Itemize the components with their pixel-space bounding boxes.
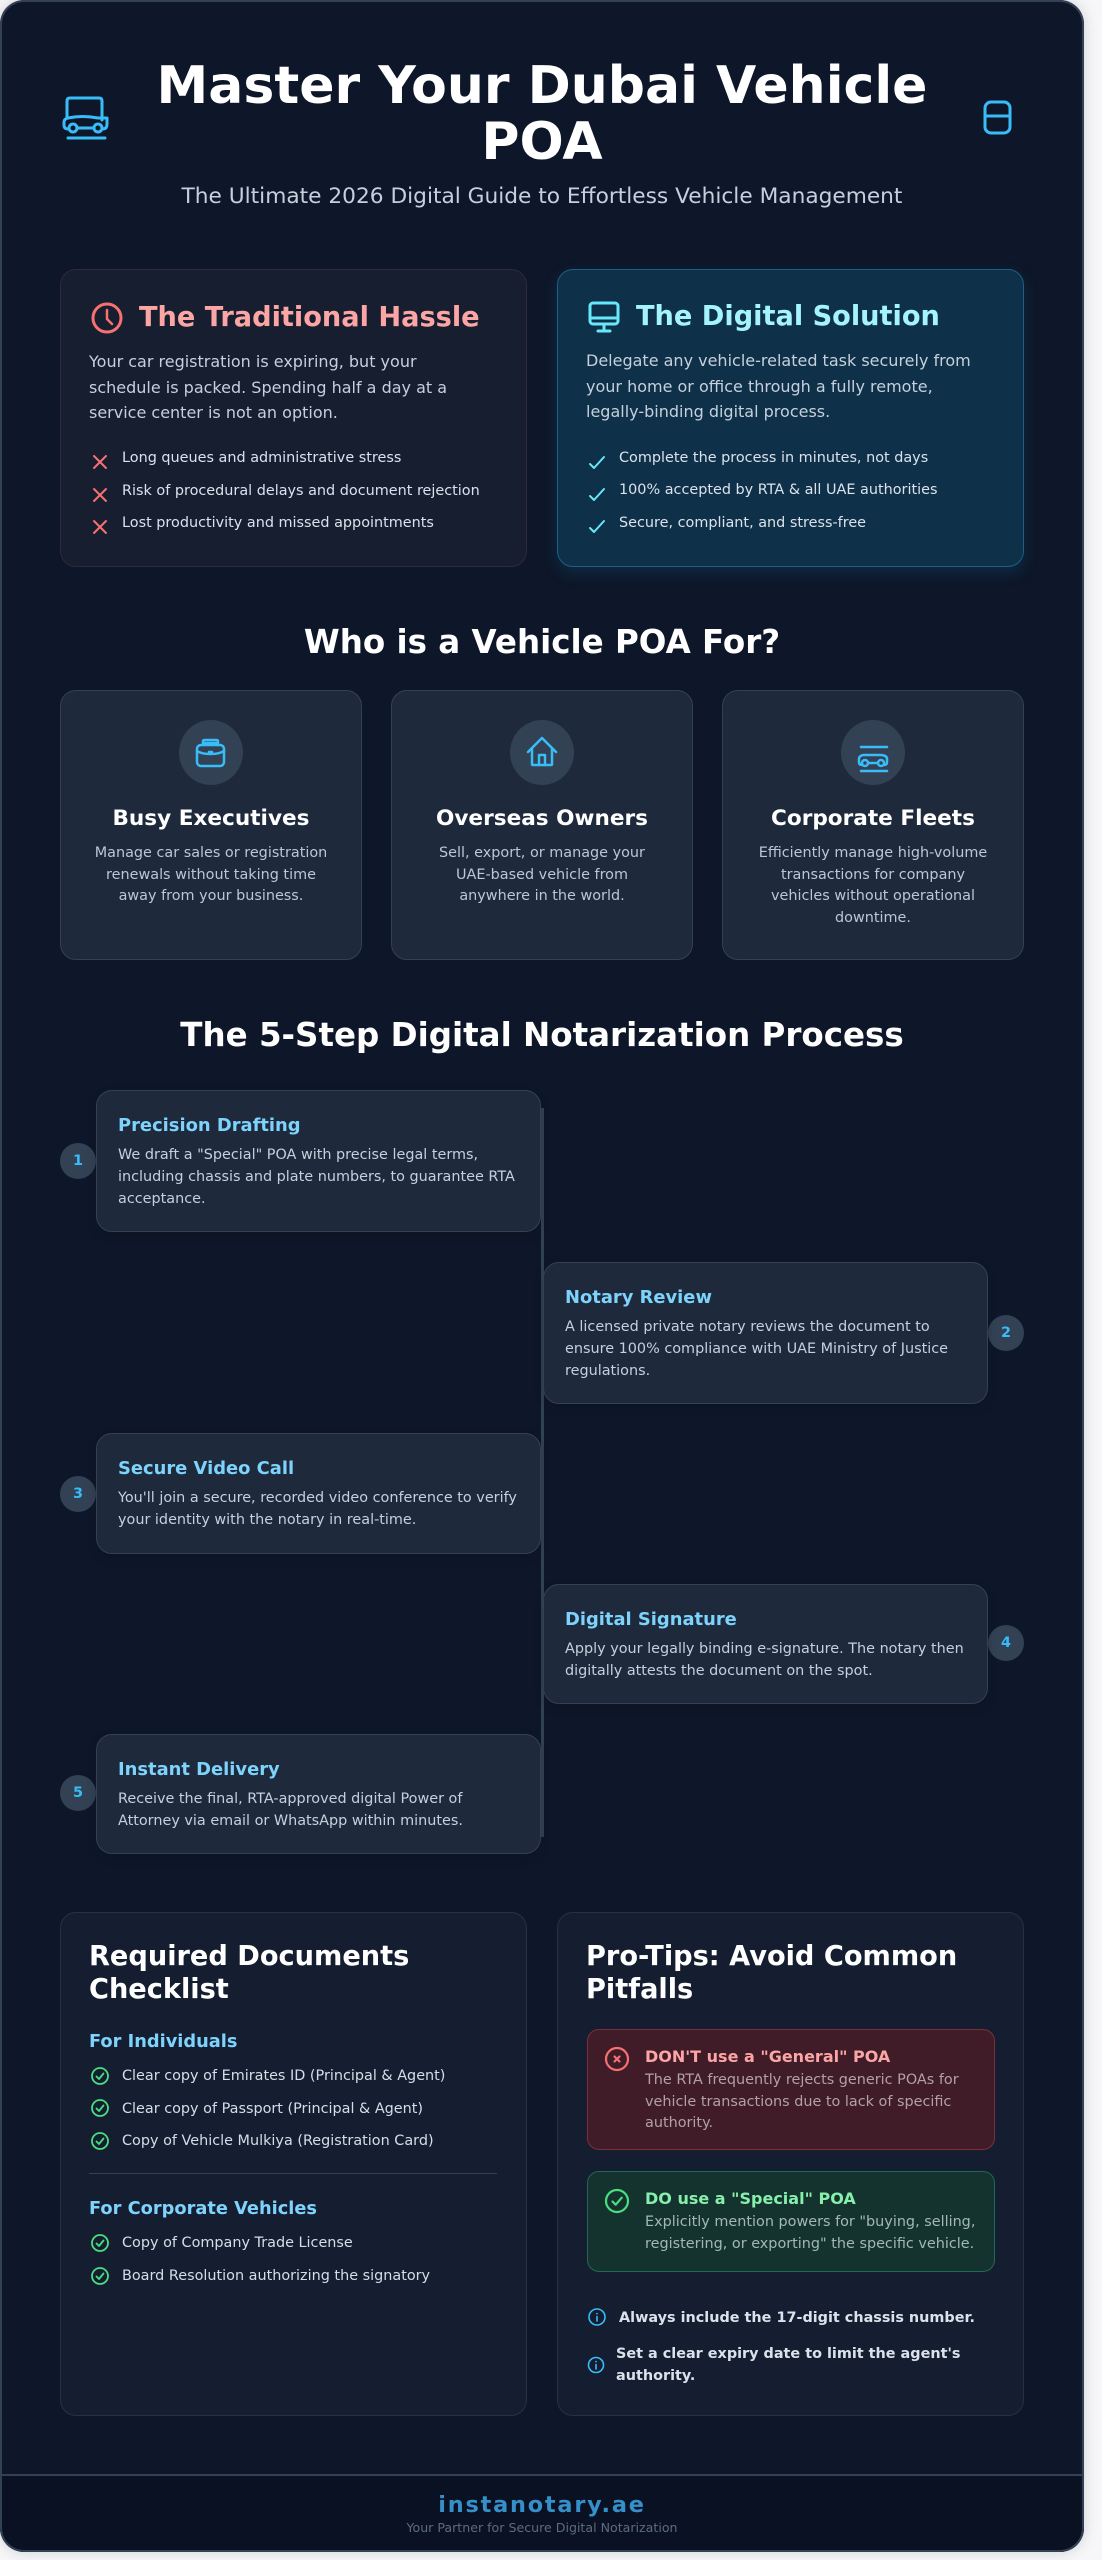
- paragraph: Delegate any vehicle-related task securely from: [586, 351, 971, 370]
- callout: do: registering, or exporting" the specific vehicle.: [645, 2236, 974, 2252]
- card text: renewals without taking time: [106, 867, 316, 883]
- step 2 card: Notary Review: [565, 1287, 712, 1308]
- card text: Sell, export, or manage your: [439, 845, 645, 861]
- step 1 card: including chassis and plate numbers, to guarantee RTA: [118, 1169, 515, 1185]
- card text: downtime.: [835, 910, 911, 926]
- callout: don't: [587, 2029, 995, 2150]
- heading: [586, 1941, 957, 2005]
- heading: The Digital Solution: [636, 301, 940, 332]
- tip: expiry date: authority.: [616, 2368, 695, 2384]
- step 5 card: Instant Delivery: [118, 1759, 280, 1780]
- icon: cross: [93, 455, 107, 469]
- timeline line: [541, 1108, 544, 1837]
- heading: Pro-Tips: Avoid Common: [586, 1941, 957, 1972]
- step 5 card: Attorney via email or WhatsApp within minutes.: [118, 1813, 463, 1829]
- heading: [89, 1941, 409, 2005]
- step 1 number: [60, 1143, 96, 1179]
- timeline: [60, 1090, 1024, 1854]
- icon: check: [589, 520, 605, 533]
- step 5 number: 5: [73, 1785, 83, 1801]
- callout: don't: The RTA frequently rejects generic POAs for: [645, 2072, 959, 2088]
- icon: check circle: [604, 2188, 630, 2214]
- step 2 number: [988, 1315, 1024, 1351]
- footer: [0, 2474, 1084, 2552]
- list: benefits: [589, 450, 937, 533]
- icon: info: [588, 2356, 604, 2374]
- icon: cross: [93, 488, 107, 502]
- step 4 card: Digital Signature: [565, 1609, 737, 1630]
- checklist: individuals: Clear copy of Emirates ID (Principal & Agent): [122, 2068, 445, 2084]
- icon: check circle: [91, 2132, 109, 2150]
- card text: away from your business.: [119, 888, 303, 904]
- checklist: corporate: Board Resolution authorizing the signatory: [122, 2268, 430, 2284]
- step 3 card: [96, 1433, 541, 1554]
- list: drawbacks: Lost productivity and missed appointments: [122, 515, 434, 531]
- heading: Pitfalls: [586, 1974, 693, 2005]
- panel: corporate fleets: [722, 690, 1024, 960]
- step 1 card: [96, 1090, 541, 1232]
- list: drawbacks: Risk of procedural delays and document rejection: [122, 482, 480, 498]
- card text: UAE-based vehicle from: [456, 867, 628, 883]
- icon: cross circle: [604, 2046, 630, 2072]
- paragraph: your home or office through a fully remote,: [586, 377, 933, 396]
- card title: Overseas Owners: [436, 806, 648, 830]
- checklist: corporate: Copy of Company Trade License: [122, 2234, 353, 2250]
- step 3 card: your identity with the notary in real-time.: [118, 1512, 416, 1528]
- card text: transactions for company: [781, 867, 965, 883]
- icon: check: [589, 488, 605, 501]
- icon: briefcase: [179, 720, 243, 785]
- step 4 card: digitally attests the document on the spot.: [565, 1663, 873, 1679]
- card text: Manage car sales or registration: [95, 845, 327, 861]
- card title: Corporate Fleets: [771, 806, 975, 830]
- paragraph: service center is not an option.: [89, 403, 338, 422]
- step 4 number: 4: [1001, 1635, 1011, 1651]
- icon: house: [510, 720, 574, 785]
- step 2 card: A licensed private notary reviews the document to: [565, 1319, 930, 1335]
- heading: who is it for: Who is a Vehicle POA For?: [304, 623, 780, 661]
- callout: do: [587, 2171, 995, 2272]
- step 1 card: acceptance.: [118, 1191, 206, 1207]
- step 2 card: ensure 100% compliance with UAE Ministry of Justice: [565, 1341, 948, 1357]
- icon: document slot: [984, 100, 1012, 134]
- title: POA: [481, 112, 603, 172]
- icon: info: [588, 2308, 606, 2326]
- panel: overseas owners: [391, 690, 693, 960]
- brand name: instanotary.ae: [438, 2492, 646, 2518]
- card text: Efficiently manage high-volume: [759, 845, 987, 861]
- paragraph: Your car registration is expiring, but your: [89, 352, 417, 371]
- header: [62, 56, 1012, 209]
- panel: the digital solution: [557, 269, 1024, 567]
- step 4 number: [988, 1625, 1024, 1661]
- step 1 card: Precision Drafting: [118, 1115, 301, 1136]
- step 5 card: Receive the final, RTA-approved digital Power of: [118, 1791, 462, 1807]
- heading: The Traditional Hassle: [139, 302, 480, 333]
- paragraph: [89, 352, 447, 422]
- icon: clock: [92, 302, 122, 334]
- step 3 number: [60, 1476, 96, 1512]
- icon: fleet car: [841, 720, 905, 785]
- icon: car and monitor: [62, 96, 108, 140]
- heading: process: The 5-Step Digital Notarization Process: [180, 1016, 904, 1054]
- card text: [439, 845, 645, 904]
- icon: check circle: [91, 2234, 109, 2252]
- tip: expiry date: Set a clear expiry date to limit the agent's: [616, 2346, 960, 2362]
- panel: required documents: [60, 1912, 527, 2416]
- subheading: corporate: For Corporate Vehicles: [89, 2198, 317, 2219]
- step 3 card: Secure Video Call: [118, 1458, 294, 1479]
- card text: vehicles without operational: [771, 888, 975, 904]
- step 5 card: [96, 1734, 541, 1854]
- icon: monitor: [588, 302, 620, 332]
- step 5 number: [60, 1775, 96, 1811]
- step 4 card: Apply your legally binding e-signature. The notary then: [565, 1641, 964, 1657]
- step 2 card: [543, 1262, 988, 1404]
- tip: expiry date: [588, 2346, 960, 2384]
- list: benefits: Complete the process in minutes, not days: [619, 450, 928, 466]
- list: drawbacks: Long queues and administrative stress: [122, 450, 401, 466]
- step 2 card: regulations.: [565, 1363, 650, 1379]
- icon: check: [589, 456, 605, 469]
- paragraph: schedule is packed. Spending half a day at a: [89, 378, 447, 397]
- title: Master Your Dubai Vehicle: [157, 56, 927, 116]
- callout: don't: authority.: [645, 2115, 713, 2131]
- subtitle: The Ultimate 2026 Digital Guide to Effortless Vehicle Management: [182, 184, 902, 209]
- card title: Busy Executives: [112, 806, 310, 830]
- callout: do: DO use a "Special" POA: [645, 2189, 856, 2208]
- tagline: Your Partner for Secure Digital Notarization: [406, 2520, 678, 2535]
- icon: check circle: [91, 2099, 109, 2117]
- checklist: corporate: [91, 2234, 430, 2285]
- step 2 number: 2: [1001, 1325, 1011, 1341]
- step 3 number: 3: [73, 1486, 83, 1502]
- checklist: individuals: [91, 2067, 445, 2150]
- callout: do: Explicitly mention powers for "buying, selling,: [645, 2214, 975, 2230]
- step 1 number: 1: [73, 1153, 83, 1169]
- heading: Checklist: [89, 1974, 229, 2005]
- subheading: individuals: For Individuals: [89, 2031, 237, 2052]
- icon: check circle: [91, 2067, 109, 2085]
- icon: check circle: [91, 2267, 109, 2285]
- step 4 card: [543, 1584, 988, 1704]
- checklist: individuals: Clear copy of Passport (Principal & Agent): [122, 2100, 423, 2116]
- callout: don't: DON'T use a "General" POA: [645, 2047, 890, 2066]
- panel: pro tips: [557, 1912, 1024, 2416]
- paragraph: legally-binding digital process.: [586, 402, 830, 421]
- checklist: individuals: Copy of Vehicle Mulkiya (Registration Card): [122, 2133, 434, 2149]
- panel: busy executives: [60, 690, 362, 960]
- panel: the traditional hassle: [60, 269, 527, 567]
- list: benefits: 100% accepted by RTA & all UAE authorities: [619, 482, 937, 498]
- title: [157, 56, 927, 172]
- list: drawbacks: [93, 450, 480, 534]
- callout: don't: vehicle transactions due to lack of specific: [645, 2094, 951, 2110]
- paragraph: [586, 351, 971, 421]
- card text: anywhere in the world.: [459, 888, 625, 904]
- card text: [759, 845, 987, 926]
- heading: Required Documents: [89, 1941, 409, 1972]
- list: benefits: Secure, compliant, and stress-free: [619, 514, 866, 530]
- tip: chassis number: Always include the 17-digit chassis number.: [619, 2310, 975, 2326]
- icon: cross: [93, 520, 107, 534]
- step 3 card: You'll join a secure, recorded video conference to verify: [118, 1490, 517, 1506]
- step 1 card: We draft a "Special" POA with precise legal terms,: [118, 1147, 478, 1163]
- card text: [95, 845, 327, 904]
